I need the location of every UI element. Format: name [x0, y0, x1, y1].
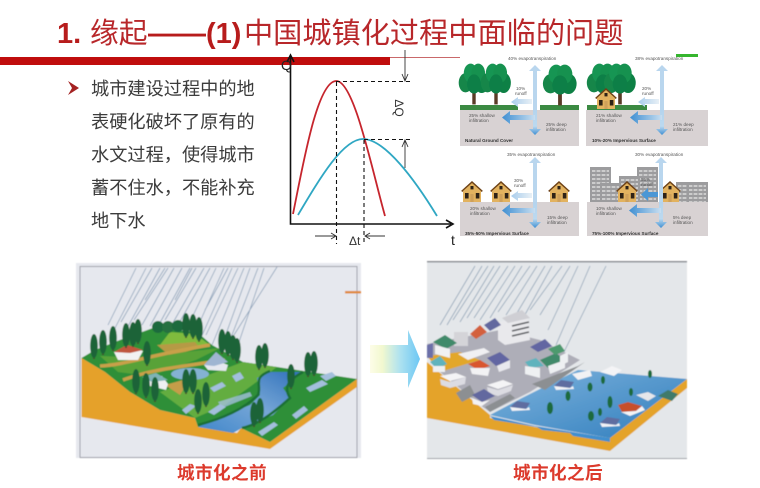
panel labels: 21% deep: [673, 122, 694, 127]
terrain: grass surface: [82, 328, 357, 442]
panel labels: 20% shallow: [470, 206, 496, 211]
panel labels: 15% deep: [547, 215, 568, 220]
red curve: [293, 81, 385, 216]
buildings: [427, 310, 568, 406]
bullet text block: 表硬化破坏了原有的: [91, 112, 255, 132]
illustration: before urbanization: [76, 263, 361, 458]
panel labels: [465, 152, 568, 236]
water arrows: [502, 157, 541, 228]
water front edge: [490, 416, 610, 442]
panel labels: infiltration: [470, 211, 490, 216]
panel labels: 30% evapotranspiration: [635, 152, 684, 157]
title rule: [0, 57, 460, 65]
bullet text block: 蓄不住水，不能补充: [91, 178, 255, 198]
blue curve: [298, 139, 437, 216]
panel labels: infiltration: [469, 118, 489, 123]
terrain: soil side: [82, 358, 357, 449]
panel: 35-50% impervious: [460, 152, 579, 236]
panel labels: 30%: [514, 178, 523, 183]
river: [198, 372, 303, 433]
panel labels: 5% deep: [673, 215, 692, 220]
arrow: before to after: [370, 330, 420, 388]
panel labels: [592, 56, 694, 143]
panel labels: Natural Ground Cover: [465, 138, 513, 143]
title: 中国城镇化过程中面临的问题: [244, 17, 623, 50]
pond: [171, 368, 209, 380]
peak difference arrows: [315, 50, 408, 239]
panel: 10-20% impervious: [586, 54, 708, 146]
rain: [440, 266, 606, 352]
orange marker: [345, 291, 361, 294]
dashed guides: [336, 82, 413, 244]
flood surface: [490, 370, 687, 438]
trees: [459, 64, 579, 110]
title: 缘起: [90, 18, 148, 50]
illustration: after urbanization: [427, 261, 687, 459]
axes: [287, 55, 453, 228]
panel labels: 21% shallow: [596, 113, 622, 118]
caption: after urbanization: 城市化之后: [513, 463, 603, 483]
houses: [461, 181, 570, 202]
trees: [90, 313, 318, 427]
water arrows: [502, 65, 541, 135]
panel labels: 10%: [516, 86, 525, 91]
panel labels: [592, 152, 693, 236]
label delta t: Δt: [349, 234, 361, 248]
green mark: [676, 54, 698, 57]
panel labels: runoff: [514, 183, 526, 188]
panel labels: runoff: [641, 182, 653, 187]
paddies: [182, 372, 336, 436]
panel labels: infiltration: [546, 127, 566, 132]
panel labels: 35%-50% Impervious Surface: [465, 231, 529, 236]
panel labels: 25% deep: [546, 122, 567, 127]
title: 1.: [57, 18, 81, 50]
hydrograph chart: [281, 50, 455, 248]
panel: 75-100% impervious: [587, 152, 708, 236]
flooded houses and trees: [510, 366, 678, 427]
panel labels: 38% evapotranspiration: [635, 56, 684, 61]
buildings and houses: [590, 167, 708, 202]
panel labels: infiltration: [596, 118, 616, 123]
icon: bullet arrow: [68, 81, 79, 95]
title: [57, 17, 623, 50]
trees and house: [587, 64, 647, 110]
panel labels: 40% evapotranspiration: [508, 56, 557, 61]
soil side: [427, 362, 687, 451]
panel labels: runoff: [642, 91, 654, 96]
panel labels: 10%-20% Impervious Surface: [592, 138, 656, 143]
caption: before urbanization: 城市化之前: [177, 463, 267, 483]
panel labels: infiltration: [596, 211, 616, 216]
bullet text block: 城市建设过程中的地: [91, 79, 255, 99]
panel labels: runoff: [515, 91, 527, 96]
panel labels: infiltration: [673, 220, 693, 225]
panel: natural ground cover: [459, 56, 579, 146]
bullet text block: [68, 79, 255, 231]
paved city: [427, 330, 580, 412]
panel labels: [465, 56, 567, 143]
axis label Q: Q: [281, 57, 292, 73]
water arrows: [629, 157, 667, 228]
panel labels: 10% shallow: [596, 206, 622, 211]
panel labels: 25% shallow: [469, 113, 495, 118]
axis label t: t: [451, 232, 455, 248]
panel labels: 75%-100% Impervious Surface: [592, 231, 659, 236]
panel labels: 20%: [642, 86, 651, 91]
bullet text block: 地下水: [91, 211, 146, 231]
panel labels: 35% evapotranspiration: [507, 152, 556, 157]
panel labels: infiltration: [673, 127, 693, 132]
houses: [114, 345, 228, 390]
rain: [108, 267, 277, 345]
water arrows: [630, 65, 668, 135]
title: ——(1): [148, 18, 241, 50]
label delta Q: ΔQ: [392, 99, 406, 117]
bullet text block: 水文过程，使得城市: [91, 145, 255, 165]
panel labels: infiltration: [547, 220, 567, 225]
panel labels: 55%: [641, 177, 650, 182]
